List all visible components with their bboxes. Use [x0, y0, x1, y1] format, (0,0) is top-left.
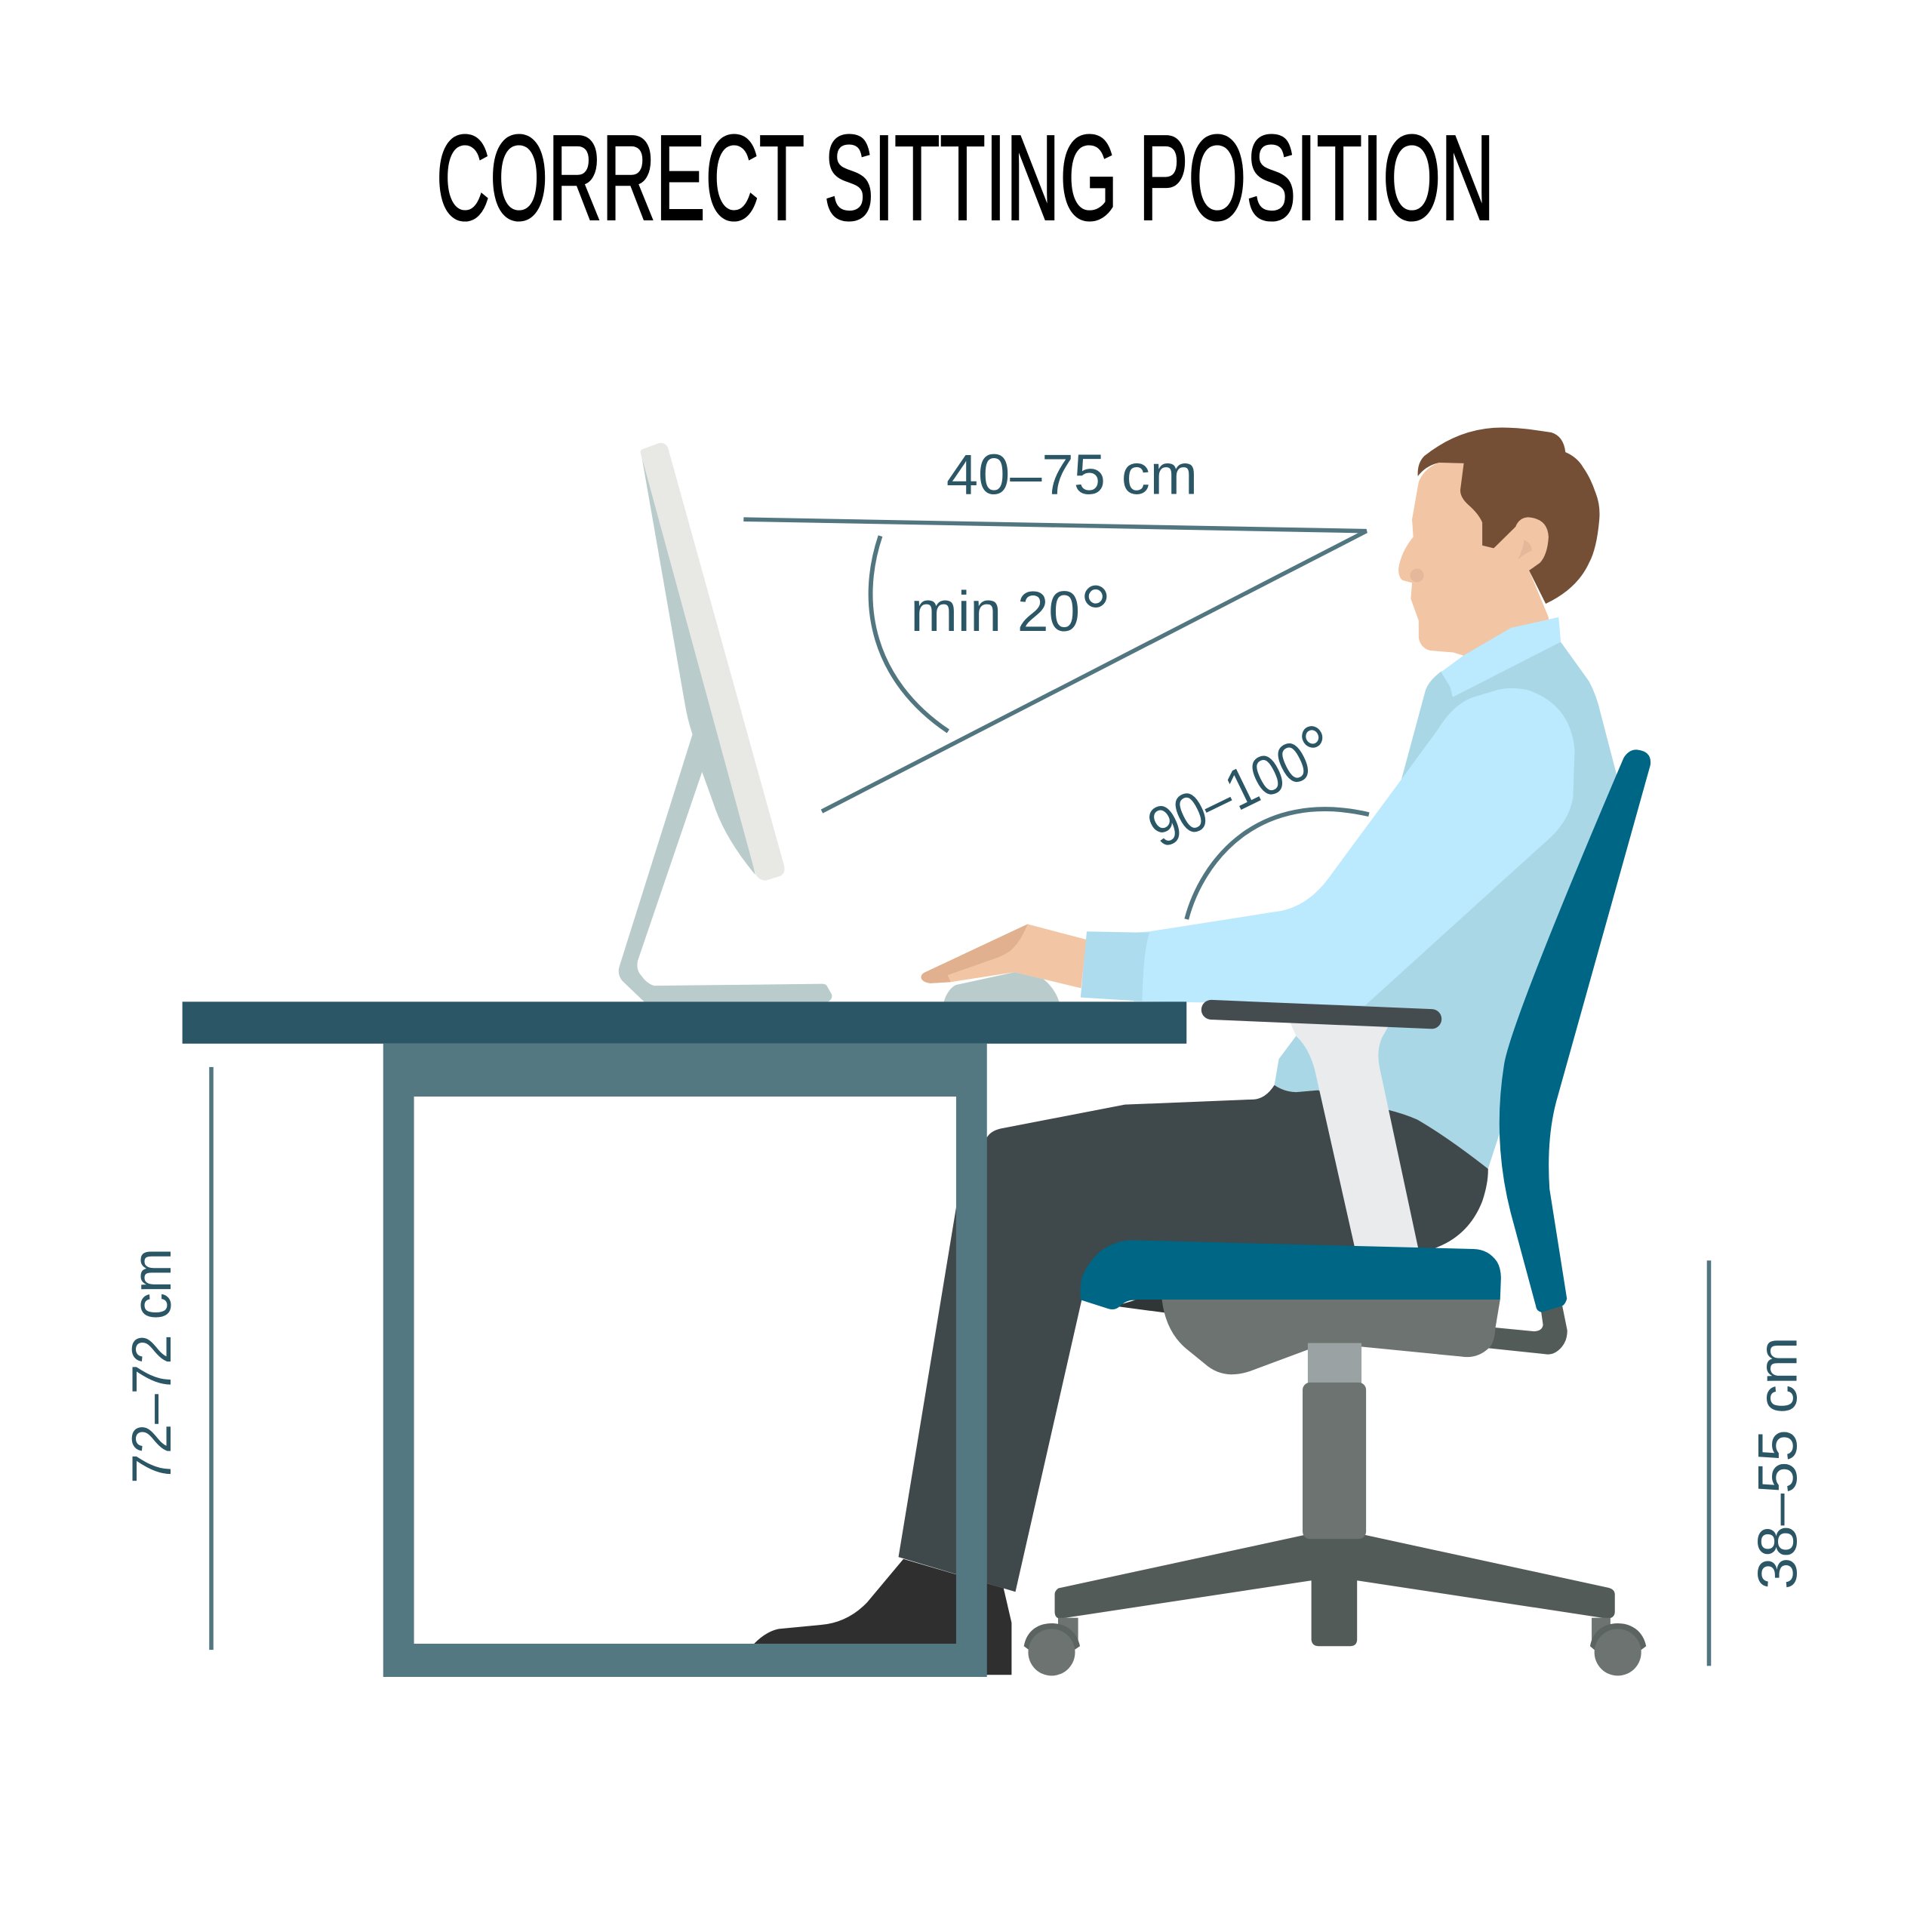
- seat cushion: [1080, 1240, 1501, 1309]
- back angle arc: [1186, 809, 1369, 919]
- seat height line: [1708, 1260, 1710, 1666]
- gas lift: [1308, 1343, 1361, 1385]
- computer monitor: [619, 443, 832, 1001]
- armrest: [1211, 1010, 1432, 1019]
- monitor screen: [641, 443, 784, 881]
- label: distance: 40–75 cm: [946, 443, 1198, 506]
- left wheel stem: [1058, 1618, 1078, 1642]
- label: back angle: 90–100: [1138, 720, 1336, 860]
- label: angle: °: [1080, 570, 1112, 658]
- shirt collar: [1441, 617, 1561, 697]
- label: desk height: 72–72 cm: [120, 1248, 183, 1484]
- seat base: [1162, 1300, 1500, 1374]
- sight lines triangle: [743, 519, 1367, 811]
- right wheel stem: [1592, 1618, 1611, 1642]
- label: back angle: °: [1287, 706, 1352, 798]
- backrest: [1500, 749, 1651, 1312]
- right wheel hood: [1590, 1623, 1646, 1650]
- viewing angle arc: [871, 536, 948, 731]
- person: [754, 428, 1620, 1675]
- right wheel: [1595, 1629, 1641, 1675]
- left wheel: [1028, 1629, 1075, 1675]
- ear inner shade: [1518, 540, 1532, 559]
- desk top: [183, 1001, 1186, 1044]
- shirt arm: [1134, 688, 1575, 1005]
- label: angle: min 20: [911, 580, 1081, 643]
- back angle guide: [1134, 706, 1369, 919]
- hair: [1418, 428, 1600, 604]
- desk: [183, 1001, 1186, 1677]
- shoe: [754, 1559, 1011, 1675]
- label: seat height: 38–55 cm: [1746, 1337, 1808, 1589]
- desk frame: [383, 1044, 987, 1677]
- base star: [1055, 1535, 1615, 1646]
- shirt cuff: [1081, 931, 1149, 1001]
- armrest post: [1287, 1017, 1418, 1248]
- trousers: [899, 1085, 1488, 1592]
- mouse: [944, 972, 1059, 1001]
- desk height line: [210, 1067, 213, 1650]
- column: [1303, 1383, 1366, 1539]
- left wheel hood: [1024, 1623, 1080, 1650]
- office chair: [1024, 749, 1651, 1675]
- monitor stand and back: [619, 451, 832, 1001]
- ear: [1494, 517, 1549, 579]
- shirt torso: [1275, 642, 1620, 1169]
- nose shade: [1411, 568, 1424, 582]
- hand: [921, 924, 1087, 988]
- viewing distance and angle guide: [743, 443, 1367, 811]
- hand shadow: [921, 924, 1028, 983]
- shadow under seat: [1115, 1299, 1183, 1313]
- neck and face: [1398, 463, 1549, 656]
- back bracket: [1487, 1306, 1567, 1355]
